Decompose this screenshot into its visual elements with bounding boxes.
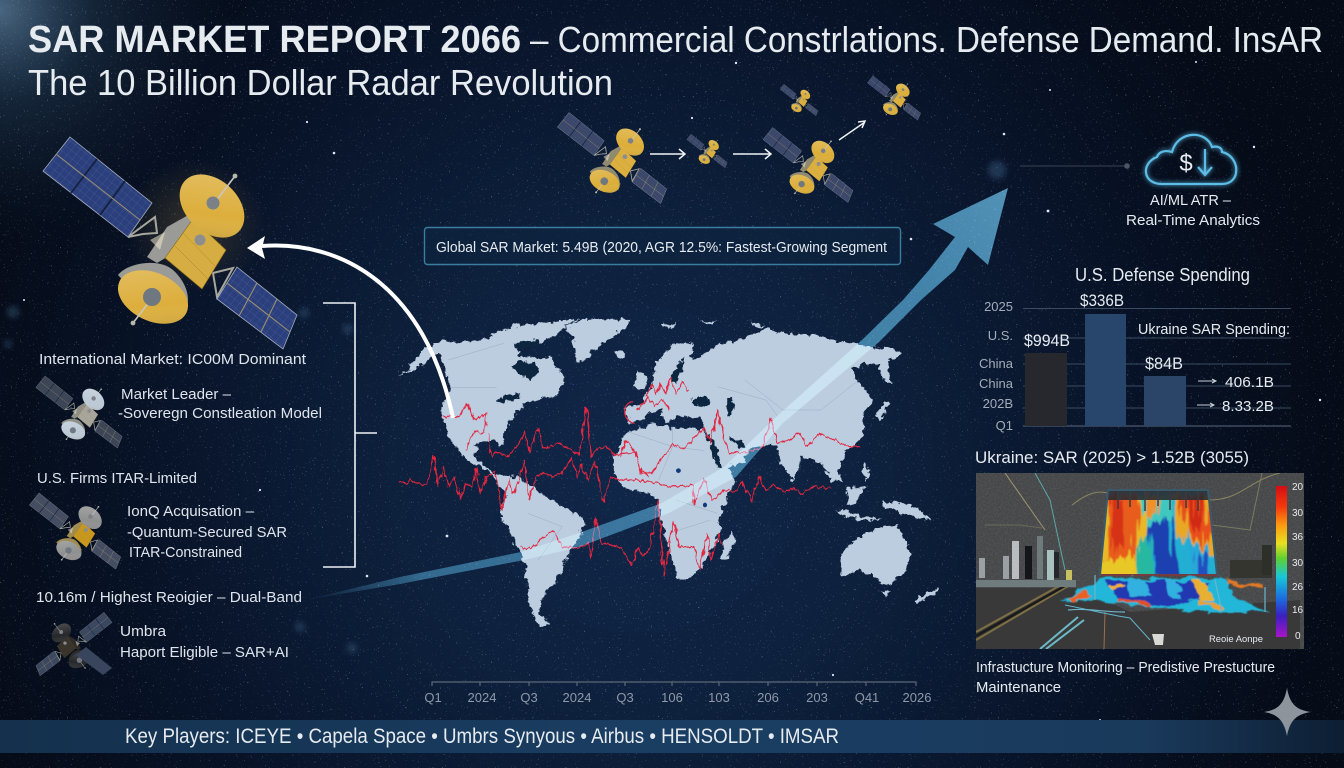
Ukraine spending	[1138, 321, 1290, 415]
blue growth arrow	[305, 188, 1008, 600]
color scale	[1276, 482, 1304, 642]
market leader text: -Soveregn Constleation Model	[118, 405, 322, 422]
color scale: 0	[1295, 631, 1301, 642]
AI caption: Real-Time Analytics	[1126, 212, 1260, 229]
image description	[976, 660, 1275, 696]
color scale: 26	[1292, 582, 1304, 593]
road surface	[976, 588, 1300, 649]
axis labels: U.S.	[988, 328, 1013, 343]
IonQ text: -Quantum-Secured SAR	[127, 524, 287, 541]
timeline: 2024	[563, 690, 591, 705]
Ukraine spending: Ukraine SAR Spending:	[1138, 321, 1290, 338]
constellation satellites	[557, 76, 921, 204]
title: The 10 Billion Dollar Radar Revolution	[28, 62, 613, 103]
coast highlight	[625, 402, 707, 507]
key players band	[0, 720, 1344, 753]
Umbra text: Umbra	[120, 623, 167, 640]
bar values: $84B	[1145, 354, 1183, 373]
heading: resolution: 10.16m / Highest Reoigier – Dual-Band	[36, 589, 302, 606]
timeline: Q41	[855, 690, 879, 705]
timeline: 103	[708, 690, 730, 705]
callout: global SAR market: Global SAR Market: 5.49B (2020, AGR 12.5%: Fastest-Growing Segment	[436, 239, 888, 256]
timeline	[424, 682, 931, 705]
image description: Maintenance	[976, 680, 1061, 696]
satellite 1	[557, 112, 667, 204]
timeline: Q3	[520, 690, 538, 705]
white curved arrow	[247, 236, 453, 418]
timeline: 206	[757, 690, 779, 705]
color scale: 20	[1292, 482, 1304, 493]
IonQ text: IonQ Acquisation –	[127, 503, 255, 520]
panel: international market	[29, 351, 322, 676]
timeline: 203	[806, 690, 828, 705]
color scale: 30	[1292, 558, 1304, 569]
Umbra text	[120, 623, 289, 661]
heat wall	[1101, 491, 1216, 574]
main satellite	[43, 137, 297, 349]
satellite 5	[867, 76, 921, 120]
arrow 1	[650, 149, 685, 159]
AI caption	[1126, 192, 1260, 229]
color scale: 36	[1292, 532, 1304, 543]
heading: International Market: IC00M Dominant	[39, 351, 307, 368]
bar values	[1024, 291, 1183, 373]
callout: global SAR market	[424, 228, 900, 264]
icon: AI cloud: $	[1179, 150, 1193, 177]
Ukraine spending: 8.33.2B	[1222, 398, 1274, 415]
heading: Ukraine SAR: Ukraine: SAR (2025) > 1.52B (3055)	[975, 448, 1249, 467]
seismic red traces	[400, 378, 861, 577]
skyline	[976, 536, 1272, 587]
timeline: 2026	[903, 690, 931, 705]
axis labels: China	[979, 356, 1014, 371]
title	[28, 19, 1323, 103]
icon: dark satellite	[36, 612, 112, 676]
axis labels	[979, 299, 1014, 433]
land masses	[400, 318, 940, 626]
icon: sparkle	[1264, 688, 1311, 736]
icon: silver satellite	[36, 376, 122, 448]
image caption: Reoie Aonpe	[1209, 634, 1263, 644]
timeline: 2024	[468, 690, 496, 705]
timeline: Q3	[616, 690, 634, 705]
satellite 3	[763, 127, 853, 203]
timeline: Q1	[424, 690, 442, 705]
icon: AI cloud	[1020, 135, 1236, 184]
world map	[400, 318, 940, 626]
Ukraine spending: 406.1B	[1225, 374, 1274, 391]
axis labels: China	[979, 376, 1014, 391]
panel: bar chart	[979, 265, 1291, 433]
flood spread	[1060, 578, 1270, 612]
bar values: $336B	[1080, 291, 1124, 310]
AI caption: AI/ML ATR –	[1150, 192, 1232, 209]
market leader text	[118, 386, 322, 422]
axis labels: 2025	[984, 299, 1013, 314]
arrow 2	[733, 149, 771, 159]
icon: mixed satellite	[29, 493, 121, 569]
bar values: $994B	[1024, 331, 1070, 350]
satellite 2	[687, 134, 727, 168]
satellite 4	[780, 84, 818, 116]
IonQ text: ITAR-Constrained	[129, 544, 242, 561]
survey lines	[985, 473, 1280, 640]
grid lines	[1023, 308, 1291, 426]
timeline: 106	[661, 690, 683, 705]
seas and lakes	[497, 339, 746, 469]
panel: InSAR heat map image	[976, 473, 1304, 649]
color scale: 30	[1292, 508, 1304, 519]
color scale: 16	[1292, 605, 1304, 616]
image description: Infrastucture Monitoring – Predistive Prestucture	[976, 660, 1275, 676]
market leader text: Market Leader –	[121, 386, 232, 403]
axis labels: Q1	[996, 418, 1013, 433]
IonQ text	[127, 503, 287, 561]
chart title: U.S. Defense Spending	[1075, 265, 1250, 285]
country borders	[448, 343, 859, 560]
arrow 3	[839, 121, 865, 140]
heading: US firms: U.S. Firms ITAR-Limited	[37, 470, 197, 487]
bars	[1025, 314, 1186, 426]
axis labels: 202B	[983, 396, 1013, 411]
bracket	[323, 303, 377, 567]
key players band: Key Players: ICEYE • Capela Space • Umbrs Synyous • Airbus • HENSOLDT • IMSAR	[125, 725, 839, 748]
title: SAR MARKET REPORT 2066	[28, 19, 521, 61]
Umbra text: Haport Eligible – SAR+AI	[120, 644, 289, 661]
